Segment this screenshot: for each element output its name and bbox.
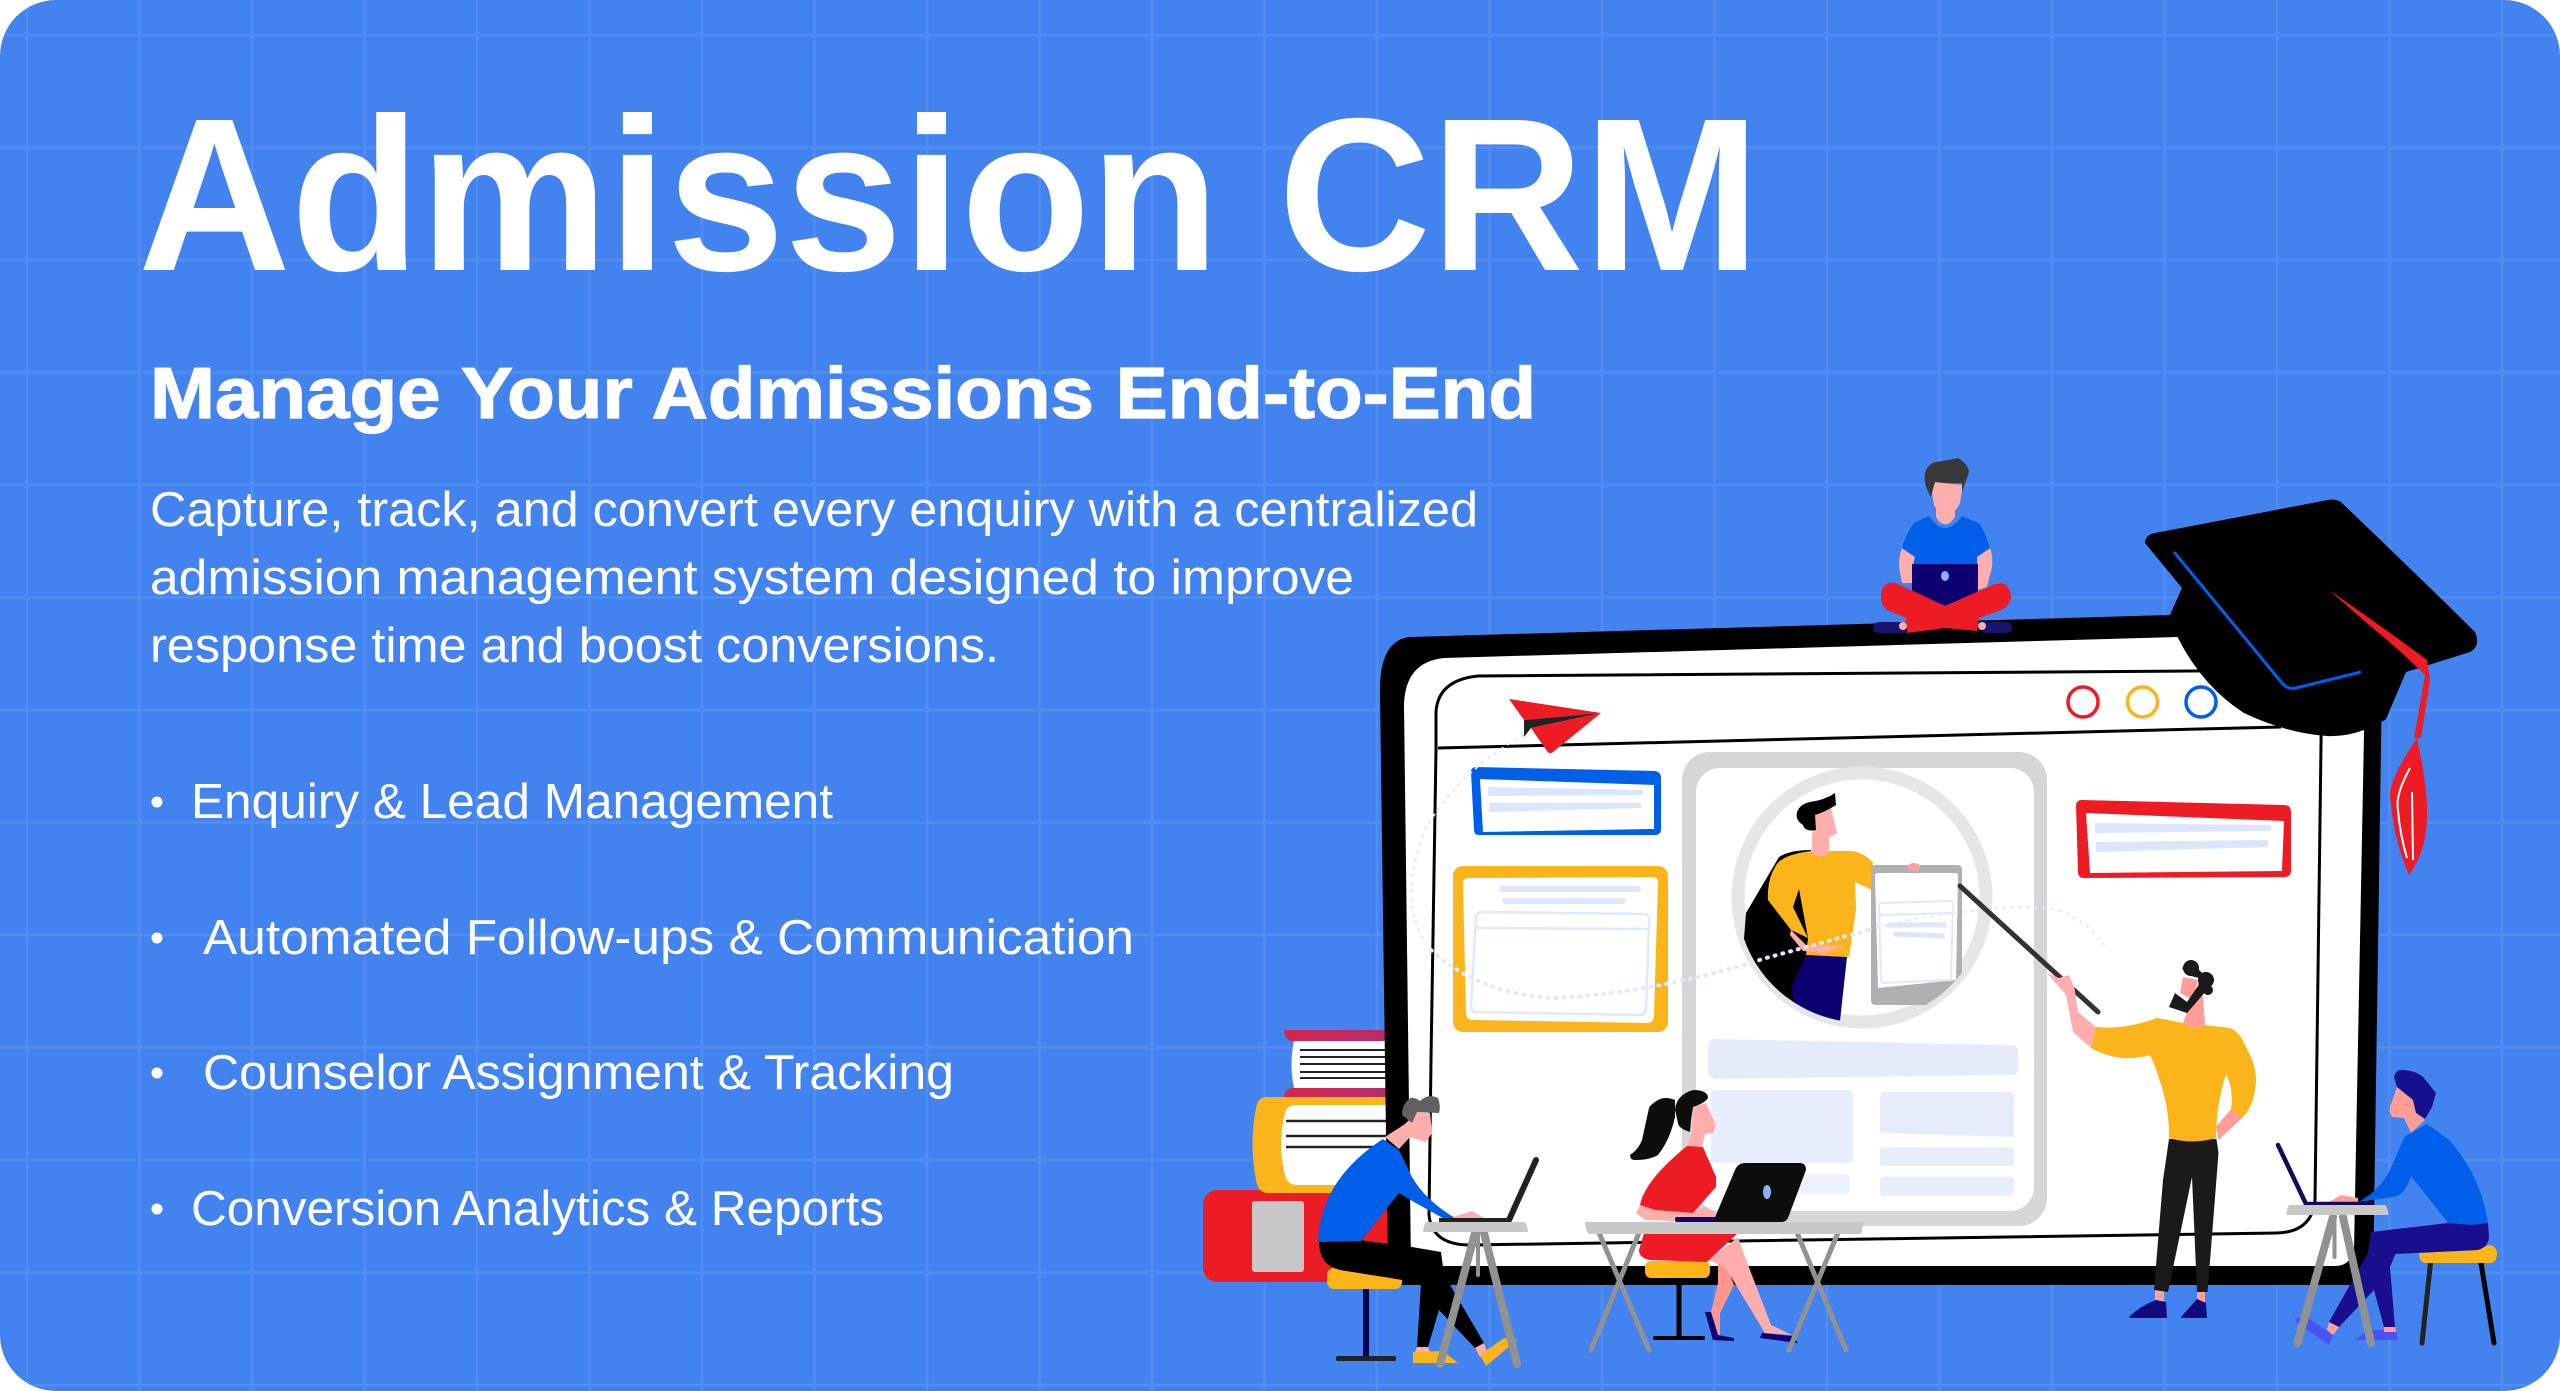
description text: response time and boost conversions.: [150, 619, 999, 673]
right man with laptop: [2278, 1070, 2497, 1345]
bullet: analytics: Conversion Analytics & Reports: [191, 1182, 884, 1236]
person sitting on frame: [1873, 458, 2012, 633]
left man with laptop: [1318, 1096, 1536, 1366]
window control dots: [2068, 687, 2216, 717]
sweater: [1768, 851, 1873, 957]
head: [1812, 833, 1829, 856]
stool: [1645, 1261, 1710, 1340]
description text: admission management system designed to improve: [150, 551, 1354, 605]
tablet: [1871, 865, 1962, 1005]
description text: [150, 483, 1478, 673]
laptop: [1439, 1160, 1536, 1220]
title: Admission CRM: [138, 74, 1760, 317]
bullet: counselor: Counselor Assignment & Tracking: [203, 1046, 954, 1100]
woman with laptop: [1585, 1090, 1864, 1350]
laptop: [1713, 1163, 1806, 1222]
paper plane: [1509, 699, 1601, 753]
table: [1591, 1228, 1846, 1350]
bullet: follow-ups: Automated Follow-ups & Communication: [203, 911, 1134, 965]
stool: [1327, 1268, 1402, 1361]
centre content panel: [1682, 752, 2047, 1226]
blue card: [1471, 767, 1661, 835]
yellow card: [1453, 866, 1668, 1032]
table: [2298, 1217, 2371, 1343]
thumb: [1908, 863, 1920, 871]
cape: [1744, 850, 1813, 1004]
description text: Capture, track, and convert every enquiry with a centralized: [150, 483, 1478, 537]
pointer stick: [1960, 886, 2098, 1012]
hand: [1790, 930, 1844, 953]
pants: [1791, 955, 1847, 1020]
red card: [2076, 800, 2291, 878]
standing man: [2047, 960, 2256, 1318]
graduation cap: [2145, 500, 2477, 875]
illustration: screen frame: [1380, 610, 2383, 1285]
bullet: enquiry: Enquiry & Lead Management: [191, 775, 833, 829]
table: [1440, 1233, 1517, 1364]
subtitle: Manage Your Admissions End-to-End: [150, 354, 1536, 434]
illustration: books: [1203, 1030, 1393, 1282]
stool: [2419, 1245, 2497, 1343]
dotted path: [1411, 735, 2104, 998]
presenter in circle: [1738, 773, 1986, 1030]
feature list: [152, 775, 1134, 1236]
laptop: [2278, 1145, 2372, 1204]
